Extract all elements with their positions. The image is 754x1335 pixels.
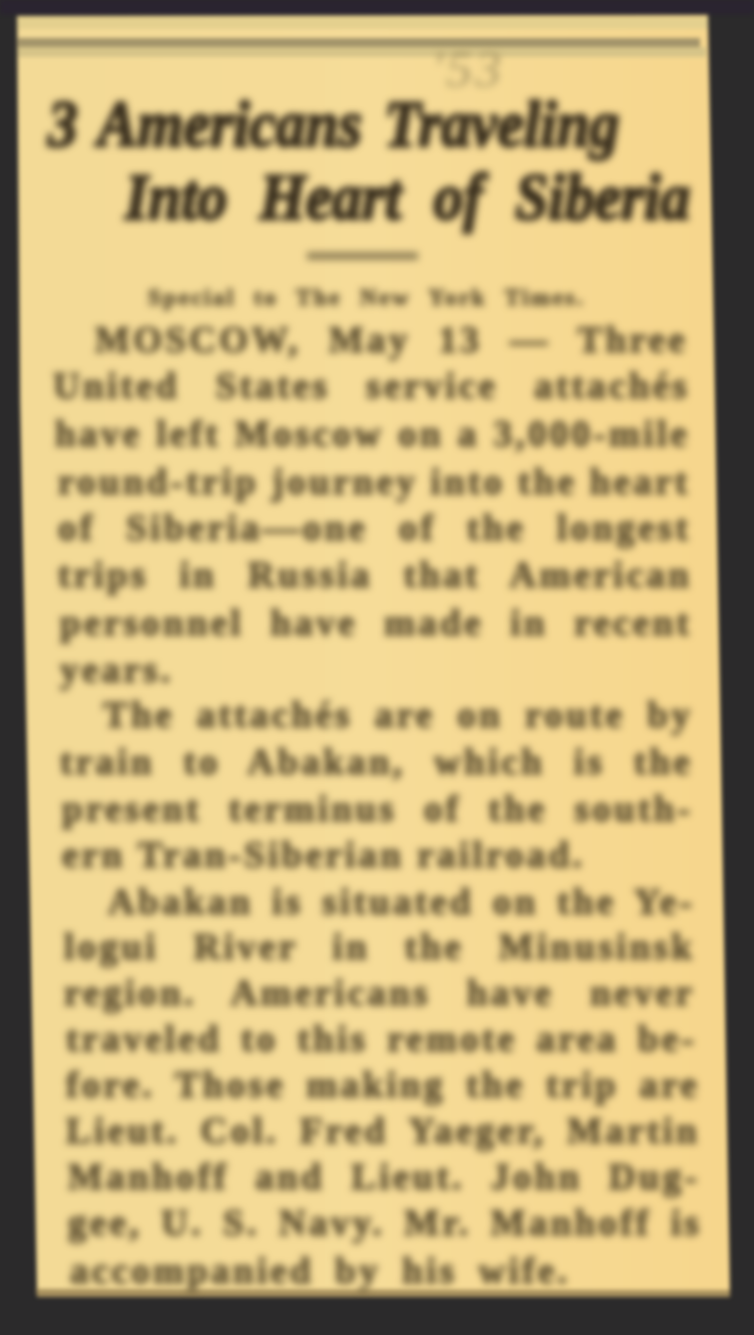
byline: Special to The New York Times. (148, 285, 585, 310)
paragraph 3: gee, U. S. Navy. Mr. Manhoff is (68, 1203, 702, 1244)
paragraph 2: present terminus of the south- (62, 789, 693, 830)
paragraph 2: train to Abakan, which is the (60, 742, 693, 783)
paragraph 1: MOSCOW, May 13 — Three (95, 320, 688, 361)
paragraph 1: round-trip journey into the heart (58, 462, 690, 503)
paragraph 1: United States service attachés (53, 366, 690, 407)
paragraph 1: have left Moscow on a 3,000-mile (55, 414, 690, 455)
paragraph 3: traveled to this remote area be- (66, 1019, 697, 1060)
paragraph 3: fore. Those making the trip are (66, 1065, 700, 1106)
paragraph 3: accompanied by his wife. (70, 1251, 570, 1292)
paragraph 3: region. Americans have never (64, 973, 695, 1014)
paragraph 3: Lieut. Col. Fred Yaeger, Martin (66, 1111, 700, 1152)
paragraph 1: years. (60, 650, 173, 691)
paragraph 1 (50, 320, 693, 696)
paragraph 1: trips in Russia that American (58, 555, 692, 596)
paragraph 2: ern Tran-Siberian railroad. (62, 835, 585, 876)
paragraph 1: of Siberia—one of the longest (58, 508, 691, 549)
paragraph 3: Manhoff and Lieut. John Dug- (68, 1157, 700, 1198)
paragraph 3: Abakan is situated on the Ye- (108, 882, 695, 923)
paragraph 3 (60, 882, 704, 1295)
headline: Into Heart of Siberia (125, 161, 690, 234)
paragraph 2: The attachés are on route by (103, 695, 693, 736)
paragraph 1: personnel have made in recent (60, 603, 692, 644)
paragraph 2 (56, 695, 694, 876)
paragraph 3: logui River in the Minusinsk (64, 927, 695, 968)
headline (40, 88, 696, 240)
handwritten note at top: '53 (432, 41, 504, 98)
headline: 3 Americans Traveling (48, 88, 620, 161)
short rule under headline (307, 252, 418, 260)
